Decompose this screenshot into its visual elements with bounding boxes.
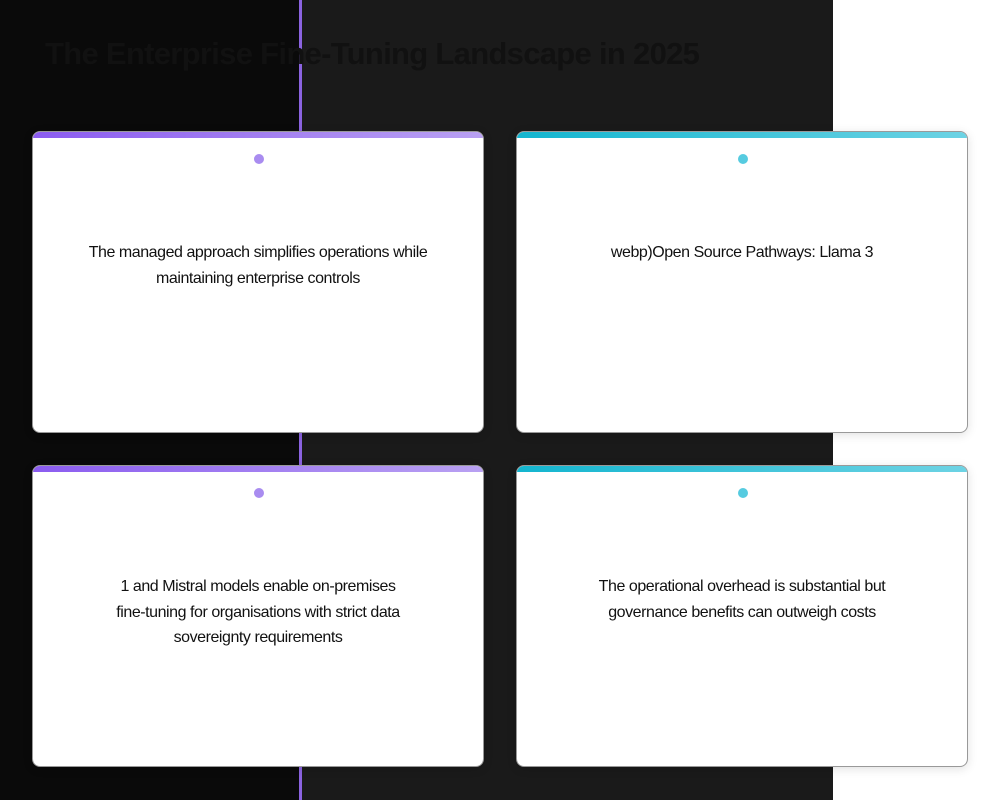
text: open source: webp)Open Source Pathways: Llama 3 — [611, 244, 873, 261]
panel: mistral on-premises — [32, 465, 484, 767]
icon: cyan dot — [738, 154, 748, 164]
text: mistral — [116, 578, 400, 646]
icon: cyan dot — [738, 488, 748, 498]
panel: managed approach — [32, 131, 484, 433]
text: overhead: The operational overhead is substantial but — [599, 578, 885, 595]
panel: operational overhead — [516, 465, 968, 767]
panel: open source pathways — [516, 131, 968, 433]
text: managed approach: The managed approach simplifies operations while — [89, 244, 427, 261]
title: The Enterprise Fine-Tuning Landscape in 2025 — [45, 36, 699, 71]
text: mistral: 1 and Mistral models enable on-premises — [120, 578, 396, 595]
text: managed approach: maintaining enterprise controls — [156, 270, 360, 286]
text: mistral: fine-tuning for organisations with strict data — [116, 604, 400, 620]
text: managed approach — [89, 244, 428, 286]
icon: purple dot — [254, 488, 264, 498]
text: mistral: sovereignty requirements — [174, 629, 342, 646]
text: overhead: governance benefits can outweigh costs — [608, 604, 876, 620]
text: overhead — [599, 578, 886, 620]
icon: purple dot — [254, 154, 264, 164]
